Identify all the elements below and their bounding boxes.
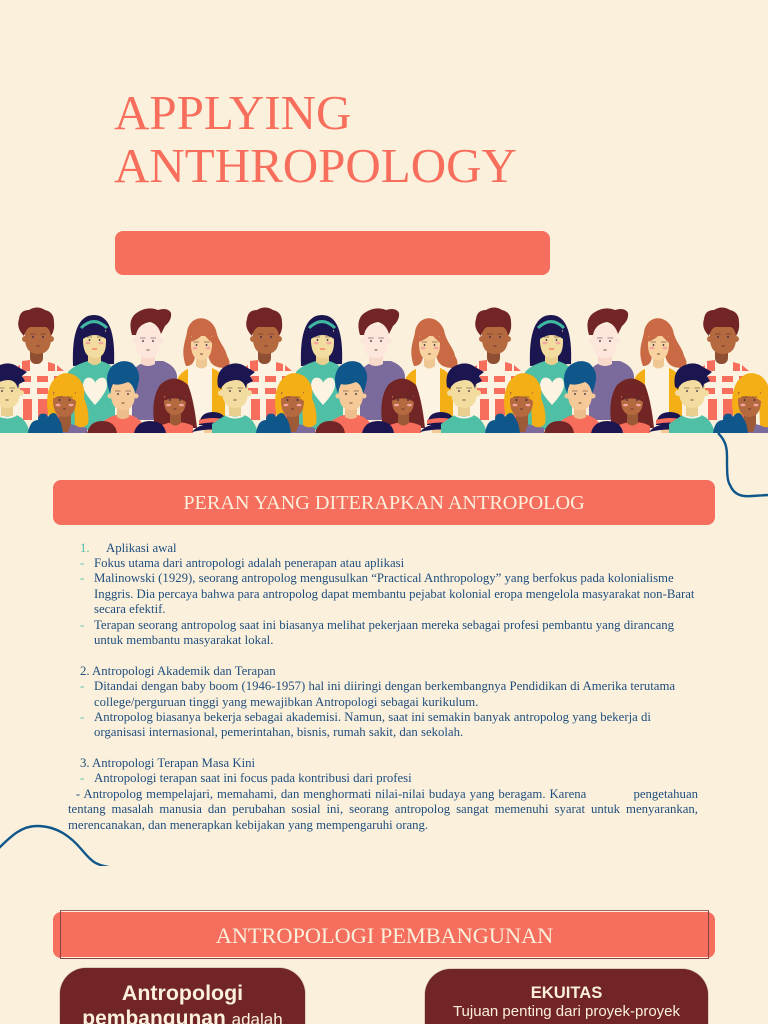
body text block: -	[80, 556, 84, 570]
body text block: Terapan seorang antropolog saat ini biasanya melihat pekerjaan mereka sebagai profesi pembantu yang dirancang	[94, 618, 674, 632]
body text block	[68, 541, 698, 832]
heading bar: antropologi pembangunan	[53, 910, 715, 959]
front row of people	[0, 361, 768, 433]
body text block: merencanakan, dan menerapkan kebijakan yang mempengaruhi orang.	[68, 818, 428, 832]
body text block: secara efektif.	[94, 602, 166, 616]
title: APPLYING	[114, 85, 351, 140]
card: antropologi pembangunan: Antropologi	[122, 981, 243, 1005]
body text block: - Antropolog mempelajari, memahami, dan menghormati nilai-nilai budaya yang beragam. Karena pengetahuan	[76, 787, 698, 801]
body text block: organisasi internasional, pemerintahan, bisnis, rumah sakit, dan sekolah.	[94, 725, 463, 739]
body text block: -	[80, 618, 84, 632]
card: ekuitas: Tujuan penting dari proyek-proyek	[453, 1003, 680, 1020]
body text block: Ditandai dengan baby boom (1946-1957) hal ini diiringi dengan berkembangnya Pendidikan di Amerika terutama	[94, 679, 675, 693]
body text block: 2. Antropologi Akademik dan Terapan	[80, 664, 276, 678]
body text block: untuk membantu masyarakat lokal.	[94, 633, 273, 647]
body text block: -	[80, 710, 84, 724]
title: ANTHROPOLOGY	[114, 138, 517, 193]
body text block: -	[80, 679, 84, 693]
subtitle banner	[115, 231, 550, 275]
back row of people	[13, 308, 750, 430]
heading bar: peran: PERAN YANG DITERAPKAN ANTROPOLOG	[183, 492, 585, 514]
body text block: Antropolog biasanya bekerja sebagai akademisi. Namun, saat ini semakin banyak antropolog yang bekerja di	[94, 710, 651, 724]
card: ekuitas	[425, 969, 708, 1024]
body text block: -	[80, 571, 84, 585]
title	[114, 85, 517, 193]
body text block: 1.	[80, 541, 90, 555]
card: ekuitas: EKUITAS	[531, 983, 602, 1002]
body text block: Malinowski (1929), seorang antropolog mengusulkan “Practical Anthropology” yang berfokus pada kolonialisme	[94, 571, 674, 585]
body text block: Inggris. Dia percaya bahwa para antropolog dapat membantu pejabat kolonial eropa mengelola masyarakat non-Barat	[94, 587, 694, 601]
decorative curve: top right	[717, 433, 768, 498]
illustration: crowd of people	[0, 308, 768, 433]
card: antropologi pembangunan	[60, 968, 305, 1024]
heading bar: peran	[53, 480, 715, 525]
decorative curve: lower left	[0, 824, 110, 866]
body text block: -	[80, 771, 84, 785]
body text block: Aplikasi awal	[106, 541, 177, 555]
body text block: Antropologi terapan saat ini focus pada kontribusi dari profesi	[94, 771, 412, 785]
body text block: college/perguruan tinggi yang mewajibkan Antropologi sebagai kurikulum.	[94, 695, 478, 709]
body text block: Fokus utama dari antropologi adalah penerapan atau aplikasi	[94, 556, 404, 570]
body text block: 3. Antropologi Terapan Masa Kini	[80, 756, 255, 770]
body text block: tentang masalah manusia dan perubahan sosial ini, seorang antropolog sangat memenuhi syarat untuk menyarankan,	[68, 802, 698, 816]
heading bar: antropologi pembangunan: ANTROPOLOGI PEMBANGUNAN	[216, 923, 553, 948]
